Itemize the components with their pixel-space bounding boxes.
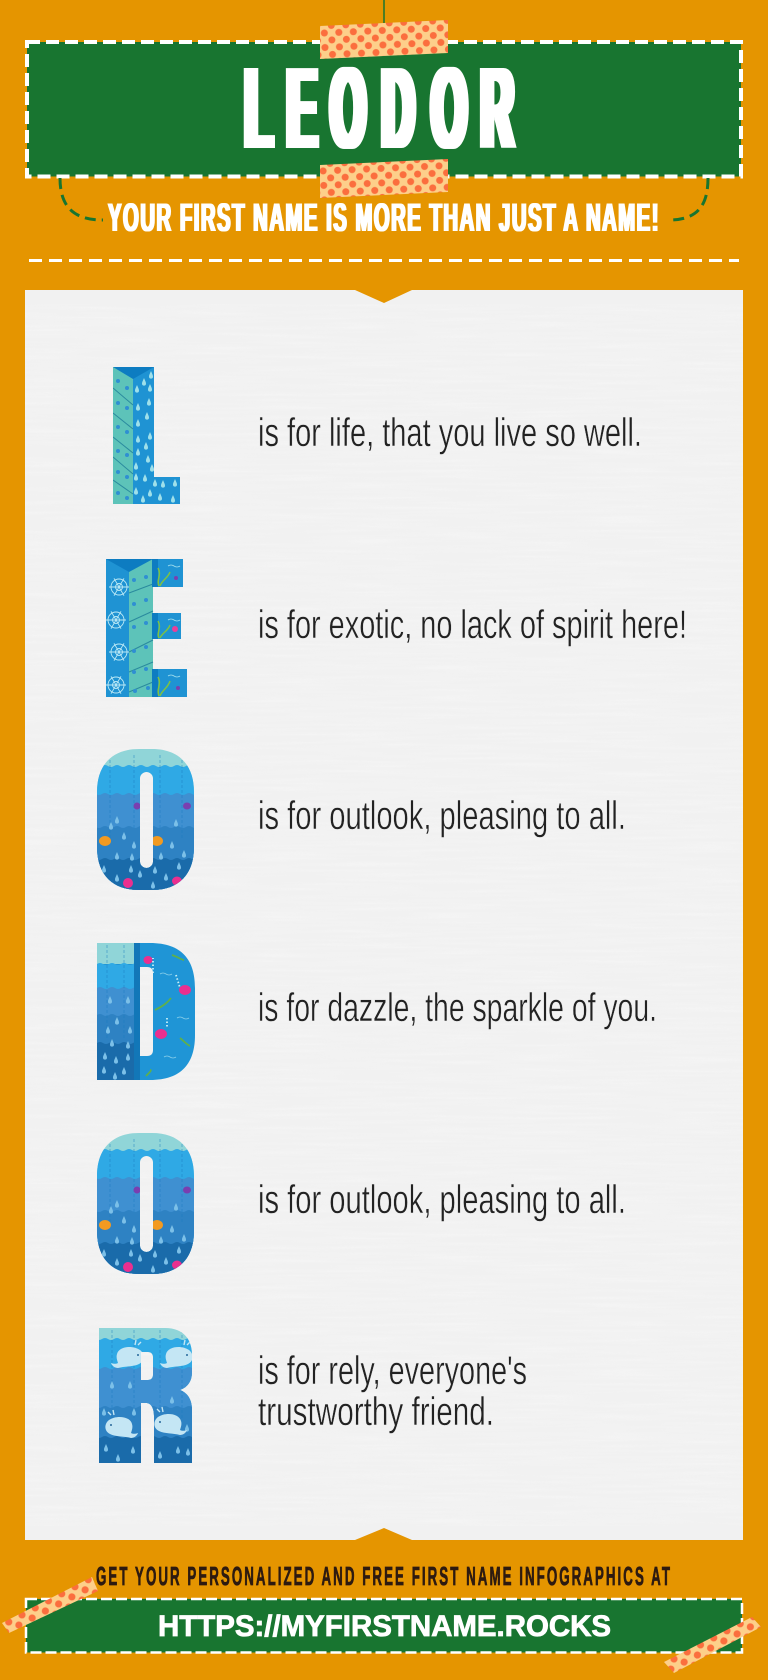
dashed curve right <box>669 178 708 220</box>
letter O (repeat) <box>90 1133 200 1274</box>
line 2: trustworthy friend. <box>258 1390 494 1434</box>
paper texture <box>25 304 743 1526</box>
letter text: O (repeat): is for outlook, pleasing to all. <box>258 1178 626 1222</box>
tape: banner bottom <box>320 159 448 198</box>
letter D <box>97 943 195 1080</box>
letter O <box>90 749 200 890</box>
footer banner background <box>26 1599 742 1652</box>
letter R <box>99 1328 192 1463</box>
letter E <box>106 559 187 697</box>
panel: letters <box>25 290 743 1540</box>
letter L <box>113 367 180 504</box>
banner background <box>27 42 741 176</box>
letter text: R <box>258 1349 527 1434</box>
tape: banner top <box>320 20 448 59</box>
footer banner <box>26 1599 742 1652</box>
tape: footer right <box>664 1617 761 1673</box>
tape: footer left <box>2 1577 98 1633</box>
panel paper <box>25 290 743 1540</box>
footer url: HTTPS://MYFIRSTNAME.ROCKS <box>158 1610 611 1643</box>
hanging thread <box>383 0 385 24</box>
dashed divider <box>29 259 739 262</box>
title banner <box>27 42 741 176</box>
dashed curve left <box>60 178 103 220</box>
line 1: is for rely, everyone's <box>258 1349 527 1393</box>
title: LEODOR <box>245 43 514 173</box>
letter text: O: is for outlook, pleasing to all. <box>258 794 626 838</box>
